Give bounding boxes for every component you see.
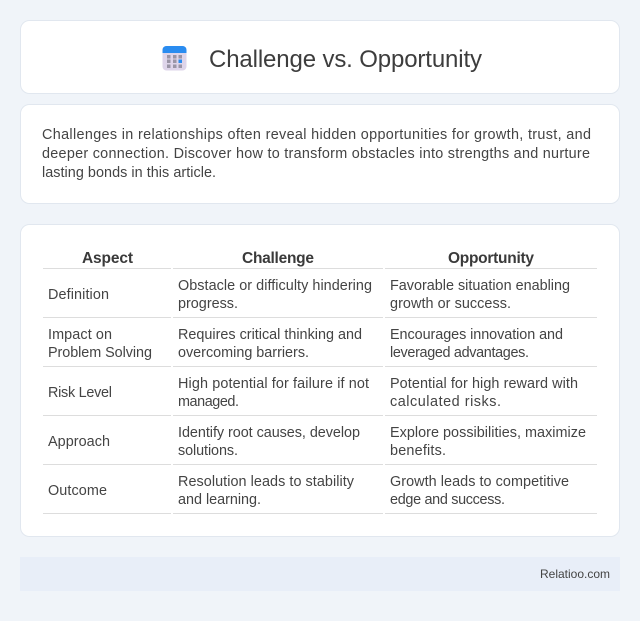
icon: calendar [162, 46, 186, 70]
row: Risk Level: High potential for failure if not [178, 376, 369, 392]
text block: introduction [42, 127, 591, 181]
row: Definition [43, 278, 597, 318]
row: Impact on Problem Solving [43, 327, 597, 366]
row: Risk Level: Potential for high reward with [390, 376, 578, 392]
row: Definition: Obstacle or difficulty hindering [178, 278, 372, 294]
footer credit: Relatioo.com [540, 567, 610, 581]
row: Risk Level: calculated risks. [390, 394, 501, 410]
panel: comparison table [20, 224, 620, 536]
text block: introduction: deeper connection. Discover how to transform obstacles into strengths and nurture [42, 146, 590, 162]
table header row [43, 250, 597, 268]
row: Approach: solutions. [178, 443, 238, 459]
row: Risk Level [43, 376, 597, 416]
row: Impact on Problem Solving: Impact on [48, 327, 112, 343]
table header row: Opportunity [448, 250, 534, 267]
row: Impact on Problem Solving: overcoming barriers. [178, 345, 309, 361]
panel: header [20, 20, 620, 94]
row: Approach [43, 425, 597, 464]
row: Risk Level: managed. [178, 394, 239, 410]
text block: introduction: lasting bonds in this article. [42, 165, 216, 181]
row: Outcome: Growth leads to competitive [390, 474, 569, 490]
title: Challenge vs. Opportunity [209, 46, 482, 73]
table header row: Aspect [82, 250, 133, 267]
row: Risk Level: Risk Level [48, 385, 112, 401]
row: Impact on Problem Solving: Requires critical thinking and [178, 327, 362, 343]
row: Approach: benefits. [390, 443, 446, 459]
row: Approach: Explore possibilities, maximize [390, 425, 586, 441]
row: Definition: growth or success. [390, 296, 511, 312]
row: Outcome: edge and success. [390, 492, 505, 508]
row: Impact on Problem Solving: leveraged advantages. [390, 345, 529, 361]
row: Outcome: Resolution leads to stability [178, 474, 355, 490]
text block: introduction: Challenges in relationships often reveal hidden opportunities for growth, trust, and [42, 127, 591, 143]
footer [20, 557, 620, 591]
row: Definition: progress. [178, 296, 238, 312]
row: Outcome: Outcome [48, 483, 107, 499]
row: Outcome [43, 474, 597, 514]
row: Definition: Favorable situation enabling [390, 278, 570, 294]
panel: intro text [20, 104, 620, 204]
row: Outcome: and learning. [178, 492, 261, 508]
row: Definition: Definition [48, 287, 109, 303]
row: Impact on Problem Solving: Problem Solving [48, 345, 152, 361]
row: Approach: Identify root causes, develop [178, 425, 360, 441]
row: Approach: Approach [48, 434, 110, 450]
table header row: Challenge [242, 250, 314, 267]
row: Impact on Problem Solving: Encourages innovation and [390, 327, 563, 343]
